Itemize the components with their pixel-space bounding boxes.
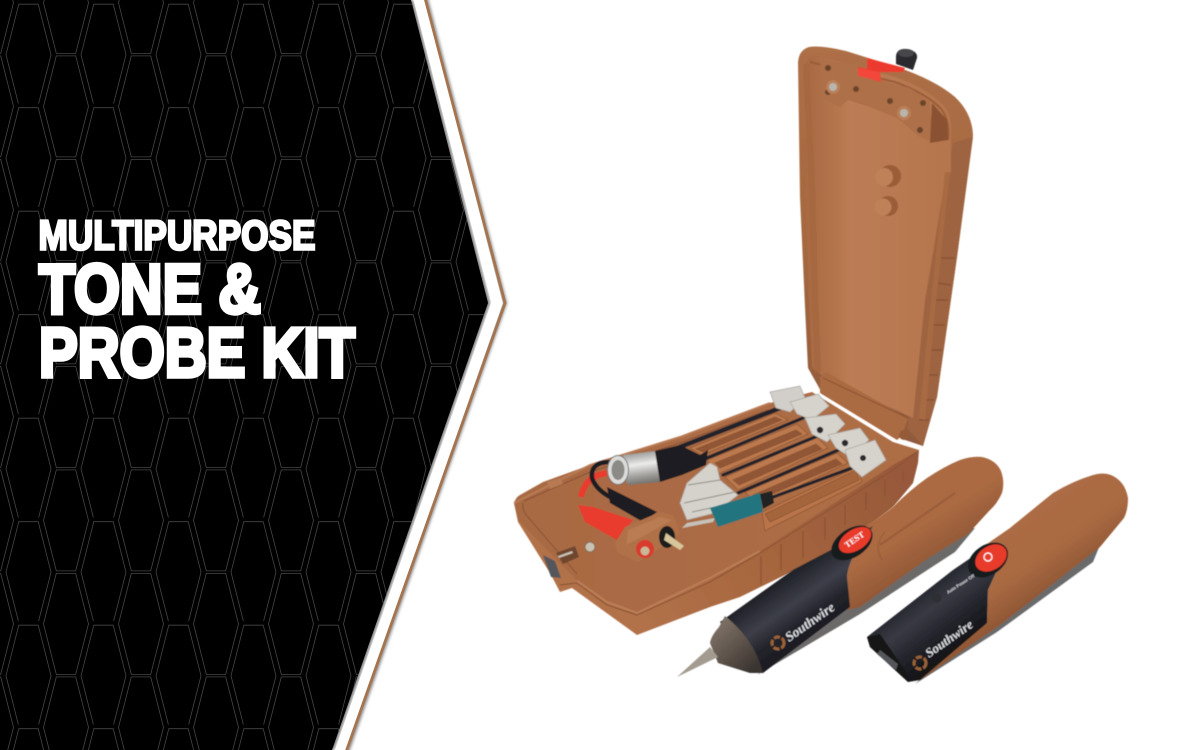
lid rim highlights [810,62,948,140]
lid mount plate [820,60,932,142]
tone auto power off label: Auto Power Off [946,573,976,595]
loose RJ connector [680,463,738,520]
base tray [514,386,919,635]
tone Southwire logo: Southwire [922,617,976,660]
title [38,212,355,392]
tone grey underside [915,545,1100,684]
tone connector port [867,634,908,682]
base top surface [514,392,919,613]
lid screws [825,65,926,133]
black antenna knob [896,49,917,70]
lid outer shell [798,46,973,446]
pen: probe [677,457,1003,677]
probe tip cone [710,616,763,673]
probe brown grip [847,457,1003,610]
base inner rim [524,410,768,501]
product photo: tone and probe kit [514,46,1128,684]
black clip and loop [592,462,657,522]
teal plug and chisel [682,491,774,528]
lid hinge bar [820,372,908,440]
red slider latch [858,58,905,82]
RJ connectors [770,386,886,477]
chevron shadows [0,0,505,750]
probe metal tip [677,647,718,677]
BNC connector [608,445,708,485]
storage wires [680,408,860,500]
brown chevron line [346,0,505,750]
tone brown grip [910,474,1128,680]
base side wall [514,450,919,635]
lid ribbed side [907,137,973,446]
storage rails [690,413,862,531]
probe test button [825,519,879,567]
base latch slot [556,546,579,564]
tone black body [867,555,1003,682]
red clip and loop [578,473,633,540]
white gap over brown shadow side [339,0,497,750]
brown jack block [615,512,684,562]
pen: tone generator [867,474,1128,684]
probe grey underside [757,528,975,675]
lid round bosses [879,165,901,187]
lid inner face [806,56,951,418]
base screw [585,542,595,552]
title line: probe kit: PROBE KIT [39,314,355,392]
title line: tone and: TONE & [39,250,261,328]
title line: multipurpose: MULTIPURPOSE [38,212,316,259]
probe test button: TEST [843,529,866,550]
RJ connector dots [817,427,866,461]
panel: black chevron with hexagon pattern [0,0,488,750]
tone power button [961,535,1015,585]
lid [798,46,973,446]
probe Southwire logo: Southwire [782,599,837,644]
base grey label [543,555,561,578]
probe black barrel [720,526,873,673]
